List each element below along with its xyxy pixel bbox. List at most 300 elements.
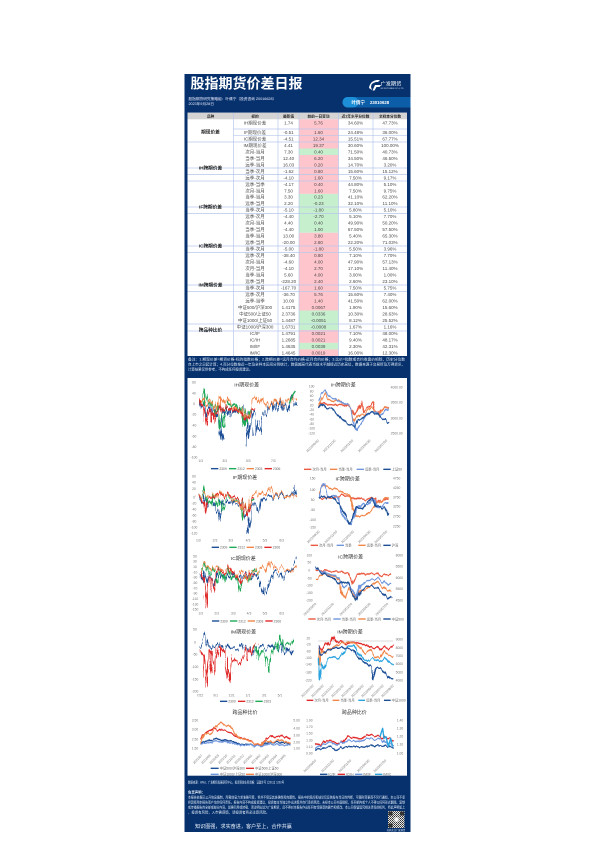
chart: IC calendar spreads: 5500 [396,587,403,591]
chart: IF calendar spreads: 沪深 [392,543,399,548]
table rows: -4.60 [283,260,294,264]
chart: IC spread seasonal: 2309 [220,619,228,623]
table rows: 9.40% [349,337,362,342]
chart: cross-index ratios: 2.00 [293,741,300,745]
chart: IF spread seasonal: 40 [192,480,196,484]
table rows: -20.00 [282,240,295,245]
table rows: 12.40 [283,156,295,161]
table rows: 34.60% [348,120,363,125]
chart: IH calendar spreads: 3500.00 [391,401,403,405]
table rows: 1.40 [314,298,323,303]
table rows: 15.60% [348,292,363,297]
chart: IM calendar spreads: 2022/11/22 [320,684,335,698]
chart: IM spread seasonal: 2312 [246,700,254,704]
chart: IC calendar spreads: -150 [306,591,313,595]
chart: IF spread seasonal: -120 [191,531,197,535]
chart: IM spread seasonal: 7/22 [197,693,203,697]
chart: IF spread seasonal: 1/3 [196,538,201,542]
table rows: IM期现价差 [244,142,267,149]
chart: IF calendar spreads: -150 [309,525,316,529]
table rows: 0.0336 [312,311,326,316]
chart: IH spread seasonal: 1/3 [198,459,203,463]
chart: IH spread seasonal: 7/3 [271,459,276,463]
table rows: 4.41 [284,143,293,148]
chart: IC calendar spreads: 2022/09/20 [303,602,317,617]
table rows: 当季-次月 [245,284,265,292]
icon: QR code: 扫码关注广发期货 [387,828,406,832]
chart: IM/IC contract ratios: IM/IC [383,773,392,777]
table rows: 48.00% [382,331,398,336]
table rows: 2.30% [349,344,362,349]
chart: IF calendar spreads: 次月-当月 [319,543,333,548]
data source note: 数据来源：Wind、广发期货发展研究中心，投资咨询业务资格：证监许可【2011】1292号 [188,780,284,784]
table rows: -4.17 [283,182,294,187]
table rows: 17.10% [348,266,363,271]
table rows: 0.40 [314,221,323,226]
chart: IM spread seasonal: 11/1 [229,693,235,697]
table rows: -5.00 [283,247,294,252]
table rows: 42.31% [382,344,398,349]
table rows: 中证500/上证50 [239,310,271,317]
chart: IC spread seasonal: 30 [193,560,197,564]
chart: IC calendar spreads: 4500 [396,598,403,602]
table rows: 15.60% [382,305,398,310]
table rows: 6.20 [314,156,323,161]
chart: IM/IC contract ratios: 1.30 [397,726,403,730]
chart: IC calendar spreads: 2023/01/20 [339,602,353,617]
table rows: 23.10% [382,279,398,284]
table rows: 19.37 [313,143,325,148]
table rows: 15.60% [348,169,363,174]
chart: cross-index ratios: 2023/05 [275,754,287,765]
chart: cross-index ratios: 2022/08 [200,754,212,765]
chart: IC calendar spreads: 100 [307,554,312,558]
chart: IC spread seasonal: -110 [192,597,198,601]
table header row: 近1年水平分位数 [342,114,370,118]
table rows: -4.10 [283,175,294,180]
chart: IC calendar spreads: 中证500 [392,616,404,621]
panel: spread table [188,113,407,356]
table rows: 7.70% [384,253,396,258]
chart: IM calendar spreads: 7000 [396,654,403,658]
table rows: 5.10% [384,208,396,213]
table rows: 1.00% [384,272,396,278]
chart: IH spread seasonal: 40 [192,392,196,396]
chart: IF spread seasonal: -60 [192,513,197,517]
table rows: 远季-当月 [245,161,265,168]
chart: cross-index ratios: 4.00 [293,726,300,730]
chart: IH spread seasonal: 5/3 [246,459,251,463]
chart: cross-index ratios: 3.50 [192,718,198,722]
chart: IH calendar spreads: -60 [309,417,314,421]
chart: IF calendar spreads: 2023/01/20 [340,530,355,544]
table rows: 11.10% [383,201,397,206]
table rows: 2.70 [314,266,323,271]
chart: IC calendar spreads: IC跨期价差 [338,553,363,560]
chart: IF spread seasonal: -100 [191,525,197,529]
table rows: 远季-次月 [245,252,265,259]
chart: IC spread seasonal: IC期现价差 [231,555,256,562]
chart: IF spread seasonal [191,474,297,550]
chart: IF spread seasonal: 60 [192,474,196,478]
chart: IC calendar spreads: -200 [306,599,313,603]
chart: IH spread seasonal: -80 [192,445,197,449]
chart: IC spread seasonal [192,554,297,623]
table rows: 11.40% [383,266,397,271]
chart: IH calendar spreads: -100 [308,427,315,431]
table rows: 36.00% [382,130,398,135]
chart: IH spread seasonal: 2306 [273,467,281,471]
chart: IH calendar spreads: 远季-当月 [365,467,379,472]
table rows: 0.0021 [312,337,326,342]
table rows: 14.70% [348,162,363,167]
chart: IM calendar spreads [300,628,406,703]
table rows: 65.30% [382,234,398,239]
disclaimer text: ，投资有风险，入市需谨慎，请投资者务必注意风险。 [188,810,269,814]
chart: IM spread seasonal: -100 [192,665,198,669]
table rows: 当季-当月 [245,155,265,162]
chart: IM calendar spreads: 9000 [396,638,403,642]
chart: IM/IC contract ratios: 1.50 [306,732,313,736]
table rows: 次月-当月 [245,187,265,194]
chart: IM spread seasonal: -200 [192,690,198,694]
chart: cross-index ratios: 2023/04 [267,754,278,765]
chart: IH spread seasonal: 2309 [219,467,227,471]
table rows: 12.34 [313,136,325,141]
chart: IH calendar spreads: -20 [309,408,314,412]
table rows: 0.0039 [312,344,326,349]
chart: IF spread seasonal: IF期现价差 [233,474,257,481]
chart: cross-index ratios: 2022/09 [209,754,220,765]
chart: IC spread seasonal: -150 [192,608,198,612]
table rows: 49.90% [348,221,363,226]
table rows: 7.50% [349,175,362,180]
table header row: 全样本分位数 [379,114,401,118]
table rows: 4.40 [284,221,293,226]
table rows: 57.13% [382,260,398,264]
table rows: 57.50% [382,227,398,232]
table rows: 47.73% [382,120,398,125]
chart: IH spread seasonal: -20 [192,413,197,417]
chart: IC spread seasonal: 3/3 [231,612,236,616]
table rows: 1.4487 [282,318,296,323]
table rows: IH期现价差 [244,119,267,126]
chart: IM/IC contract ratios: IM/IF [363,773,371,777]
table rows: 100.00% [381,143,399,148]
table rows: 次月-当月 [245,148,265,155]
chart: IM calendar spreads: 2023/01/22 [330,684,345,698]
logo: company mark and name: 广发期货 [380,80,401,88]
table rows: -228.20 [281,279,297,284]
table rows: 7.50% [349,286,362,290]
table rows: -4.10 [283,266,294,271]
chart: IH spread seasonal: 0 [193,402,195,406]
table rows: -0.23 [313,201,324,206]
table rows: 2.60% [349,279,362,284]
chart: IC calendar spreads: 50 [307,560,311,564]
table rows: 5.10% [349,214,362,219]
table rows: -0.0008 [311,324,327,329]
chart: cross-index ratios: 2023/03 [259,754,270,765]
table rows: 5.50% [349,247,362,252]
chart: cross-index ratios: 中证500/上证50 [255,766,279,771]
chart: IM calendar spreads: 2022/09/22 [310,684,325,698]
chart: IH calendar spreads: 80 [310,389,314,393]
chart: IC calendar spreads: 2022/11/20 [320,602,335,617]
table rows: 0.80 [314,169,323,174]
chart: IF spread seasonal: 2/3 [213,538,217,542]
table rows: -4.40 [283,227,294,232]
chart: IF calendar spreads: 2750 [393,515,400,519]
chart: cross-index ratios: 跨品种比价 [233,709,257,716]
chart: IC spread seasonal: 2303 [256,619,264,623]
chart: IC calendar spreads: 6000 [396,576,403,580]
table rows: 15.12% [382,169,398,174]
table rows: 中证1000/上证50 [238,317,273,324]
chart: IC calendar spreads: 当季-当月 [342,616,356,621]
chart: IF calendar spreads: -100 [309,518,316,522]
table rows: -167.70 [281,286,297,290]
chart: cross-index ratios: 2023/01 [242,754,253,765]
group labels: IF跨期价差 [199,204,222,210]
table rows: 1.90% [349,305,362,310]
chart: cross-index ratios: 2022/12 [234,754,245,765]
table rows: 0.23 [314,195,323,200]
chart: IH calendar spreads: 当季-当月 [338,467,353,472]
table header row: 较前一日变动 [307,114,330,118]
table rows: -4.51 [283,136,294,141]
chart: IF calendar spreads: 4250 [393,486,400,490]
table rows: 远季-当月 [245,200,265,207]
chart: IM/IC contract ratios: 跨品种比价 [342,709,367,716]
chart: IM/IC contract ratios: 1.00 [397,751,403,755]
chart: cross-index ratios: 2022/10 [217,754,228,765]
table rows: 当季-当月 [245,233,265,240]
table rows: 当季-次月 [245,246,265,253]
chart: IM calendar spreads: 次月-当月 [314,698,329,703]
table rows: 5.10% [384,182,396,187]
chart: IF spread seasonal: 20 [192,487,196,491]
chart: IM calendar spreads: 2023/05/22 [350,684,365,698]
callout: analyst pill: 23010628 [370,100,390,105]
chart: IM calendar spreads: 远季-当月 [366,698,380,703]
chart: IH calendar spreads: -80 [309,422,314,426]
chart: IM calendar spreads: 当季-当月 [340,698,355,703]
table rows: 0.20 [314,162,323,167]
table rows: 远季-次月 [245,291,265,298]
chart: IF calendar spreads: 远季-当月 [367,543,381,548]
table rows: 24.48% [348,130,363,135]
table rows: 12.30% [382,350,398,355]
table rows: 22.20% [348,240,363,245]
chart: cross-index ratios: 2023/02 [250,754,262,765]
table rows: 次月-当月 [245,220,265,227]
chart: IF calendar spreads: 2023/07/20 [374,530,388,544]
chart: IH calendar spreads: IH跨期价差 [331,382,356,389]
chart: IC spread seasonal: -10 [193,570,198,574]
chart: IF spread seasonal: 2312 [238,546,245,550]
table rows: 44.80% [348,182,363,187]
table rows: 40.73% [382,149,398,154]
chart: IH calendar spreads: 2500.00 [391,431,403,435]
table rows: 67.50% [348,227,363,232]
table rows: 1.60 [314,175,323,180]
table rows: 5.60 [284,272,293,278]
table rows: 次月-当月 [245,258,265,266]
table rows: 0.40 [314,182,323,187]
table footnote: 备注：1.期现价差=期货价格-标的指数价格；2.跨期价差=远月合约价格-近月合约价格；3.比价=指数或合约收盘价相除，历史分位数 [188,356,406,362]
chart: IC spread seasonal: 5/3 [263,612,267,616]
table rows: 当季-当月 [245,226,265,233]
group labels [199,128,223,334]
table rows: 5.80% [349,208,362,213]
disclaimer text: 担因使用本报告而产生的任何责任。报告内容不构成投资建议，投资者应当独立作出决策并自行承担风险。未经本公司书面授权，任何机构或个人不得以任何形式翻版、复制 [188,800,406,804]
table rows: 3.20% [384,162,396,167]
table rows: 远季-当季 [245,297,265,304]
group labels: IM跨期价差 [199,281,223,288]
table rows: 34.50% [348,156,363,161]
chart: IC calendar spreads: 6500 [396,565,403,569]
table rows: 7.40% [384,292,396,297]
chart: IF calendar spreads: IF跨期价差 [335,476,360,483]
table rows: 远季-当季 [245,181,265,188]
chart: IM calendar spreads: -140 [305,663,312,667]
chart: IH calendar spreads: 100 [309,385,315,389]
chart: IM calendar spreads: IM跨期价差 [337,628,363,635]
chart: IF spread seasonal: 2303 [255,546,263,550]
chart: IH calendar spreads: 2022/11/20 [322,439,337,453]
chart: IC spread seasonal: -30 [193,576,198,580]
chart: IM spread seasonal [192,627,296,704]
chart: IC calendar spreads: -50 [307,576,312,580]
table rows: 1.4645 [282,350,296,355]
table rows: -2.70 [313,214,324,219]
chart: IF calendar spreads: 当季 [345,543,352,548]
chart: IH calendar spreads: 4000.00 [391,385,403,389]
table rows: IM/IC [250,350,261,355]
chart: IF calendar spreads: 150 [310,477,316,481]
chart: IC calendar spreads: 2023/07/20 [375,602,389,617]
chart: IC spread seasonal: -50 [193,581,198,585]
table rows: 62.20% [382,195,398,200]
chart: IF spread seasonal: -80 [192,519,197,523]
chart: IM/IC contract ratios: 1.40 [397,718,403,722]
chart: IC calendar spreads: 远季-当月 [367,616,381,621]
table rows: 当季-次月 [245,168,265,175]
chart: IH spread seasonal: -40 [192,424,197,428]
table rows: 当季-次月 [245,207,265,214]
chart: IF calendar spreads: -50 [310,508,315,512]
chart: IM calendar spreads: 8000 [396,646,403,650]
chart: IC spread seasonal: -70 [193,586,198,590]
table rows: 中证500/沪深300 [238,304,273,311]
table rows: 5.76 [314,292,323,297]
panel: navy page background [184,74,410,832]
chart: IF spread seasonal: -40 [192,507,197,511]
chart: IM/IC contract ratios: 1.10 [397,743,403,747]
chart: IM calendar spreads: 5000 [396,671,403,675]
table rows: 远季-当月 [245,239,265,246]
table rows: 1.4791 [282,331,296,336]
table rows: 71.50% [348,149,363,154]
chart: cross-index ratios: 5.00 [293,718,300,722]
chart: IM/IC contract ratios: 1.30 [306,738,313,742]
table rows: 3.80 [314,234,323,239]
table rows: 当季-当月 [245,272,265,278]
chart: IM/IC contract ratios: 1.90 [306,718,313,722]
table rows: 1.60 [314,188,323,193]
chart: IM spread seasonal: 50 [193,627,197,631]
table rows: 5.76 [314,120,323,125]
chart: cross-index ratios: 中证1000/上证50 [220,772,245,777]
disclaimer text: 本报告依据已公开信息编制，所载信息力求准确可靠，但并不保证其准确性和完整性。报告中的观点和结论仅反映发布当日的判断，可随时变更而不另行通知，本公司不承 [188,794,406,800]
disclaimer text [188,790,406,814]
chart: IF calendar spreads: 2022/11/20 [324,530,338,544]
chart: IH calendar spreads: 3000.00 [391,416,403,420]
group labels: IC跨期价差 [199,242,223,249]
chart: IC spread seasonal: 10 [193,565,197,569]
table rows: 28.63% [382,311,398,316]
chart: IM spread seasonal: 1/1 [246,693,250,697]
chart: IM calendar spreads: 2023/06/22 [360,684,375,698]
chart: cross-index ratios: 2022/07 [192,754,203,765]
chart: IC calendar spreads: -100 [306,584,313,588]
table rows: 10.30% [348,311,363,316]
table rows: 1.4635 [282,344,296,349]
subtitle: author and date: 股指期货研究策略组：叶倩宁（投资咨询 Z0016628） [188,96,276,101]
disclaimer text: 或传播报告的全部或部分内容。如需引用或转载，须注明出处为广发期货，且不得对本报告作出任何有悖原意的删节和修改。本公司保留追究相关责任的权利，特此声明如上 [188,804,406,810]
chart: IM calendar spreads: 2023/03/22 [340,684,355,698]
table rows: 远季-次月 [245,174,265,181]
table rows: 5.40% [349,234,362,239]
chart: cross-index ratios: 2022/11 [225,754,237,765]
table rows: -5.10 [283,208,294,213]
table rows: 7.10% [349,253,362,258]
chart: IC spread seasonal: 6/3 [279,612,284,616]
chart: IM calendar spreads: 20 [306,637,310,641]
table rows: 3.30 [284,195,293,200]
table rows: 7.50% [349,188,362,193]
chart: IF spread seasonal: 4/3 [246,538,250,542]
chart: IC spread seasonal: -90 [193,592,198,596]
table rows: 50.20% [382,221,398,226]
table rows: IC期现价差 [244,135,267,142]
table rows: IC/IH [250,337,260,342]
table rows: 5.75% [384,286,396,290]
table rows: 62.00% [382,298,398,303]
group labels: 期现价差 [201,128,220,136]
table rows: 1.60 [314,286,323,290]
chart: IH calendar spreads: -120 [308,431,315,435]
chart: IC spread seasonal: -130 [192,602,198,606]
table rows: 15.51% [348,136,363,141]
table rows: -38.40 [282,253,295,258]
chart: IC spread seasonal: 2306 [274,619,281,623]
chart: IH calendar spreads: -40 [309,413,314,417]
table rows: 1.60 [314,130,323,135]
chart: IM calendar spreads: 2023/07/22 [370,684,385,698]
table header row: 最新值 [283,114,294,118]
title: 股指期货价差日报 [190,76,302,92]
table rows: 4.00 [314,260,323,264]
callout: analyst pill: 叶倩宁 [352,99,365,106]
chart: IM/IC contract ratios [303,709,403,777]
table rows: 7.50 [284,188,293,193]
table header row: 品种 [207,114,214,118]
table rows: 9.17% [384,175,396,180]
chart: IH spread seasonal: -60 [192,434,197,438]
table rows: -1.80 [313,247,324,252]
